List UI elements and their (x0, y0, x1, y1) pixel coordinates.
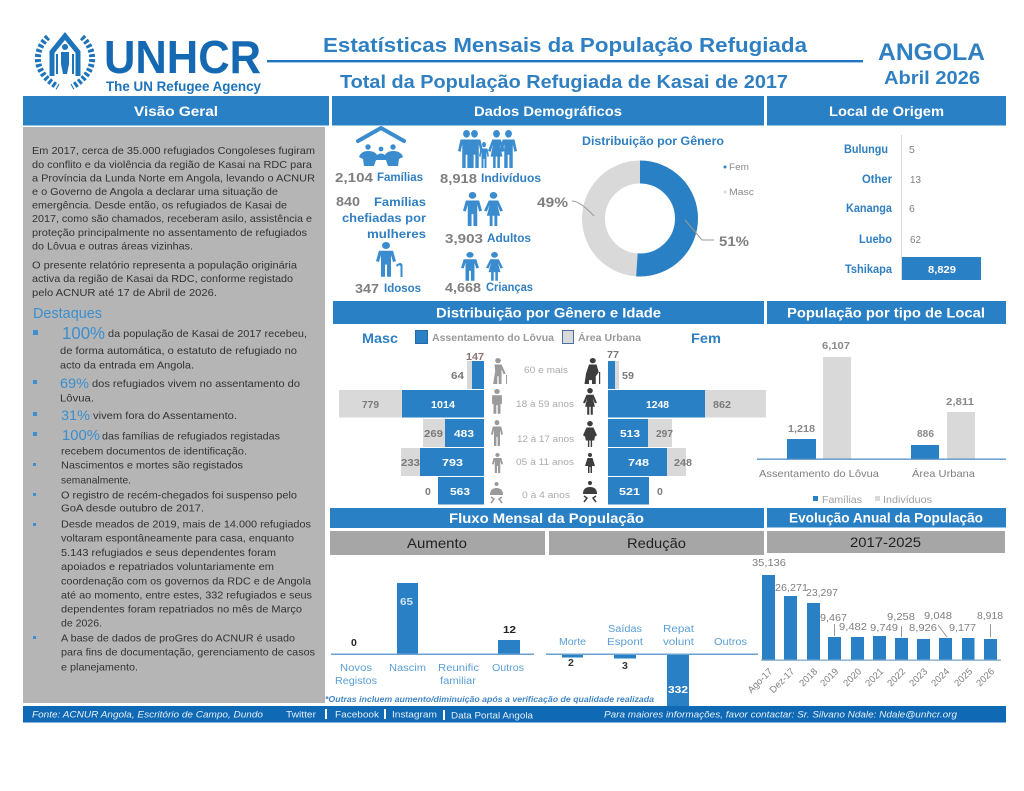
chart: monthly increase: 65 (400, 596, 413, 608)
values: 297 (656, 428, 673, 440)
values: 862 (713, 399, 731, 411)
axis labels: 2020 (841, 666, 864, 689)
header: Distribuição por Gênero e Idade: Distribuição por Gênero e Idade (436, 306, 662, 320)
icon: elderly (376, 242, 402, 277)
bullet list: para fins de documentação, gerenciamento de casos (61, 646, 315, 658)
bullet list: Nascimentos e mortes são registados (61, 460, 243, 472)
bullet list: de 2026. (61, 618, 102, 630)
icon: adults (463, 192, 503, 226)
values: 513 (620, 428, 640, 440)
chart: monthly decrease: Espont (607, 637, 643, 648)
chart: origin: Other (862, 174, 893, 186)
text block: introduction: activa da região de Kasai da RDC, conforme registado (32, 273, 293, 285)
values: 0 (657, 486, 663, 498)
chart: monthly increase: Novos (340, 663, 372, 674)
chart: origin (844, 135, 981, 280)
title: Estatísticas Mensais da População Refugiada (323, 34, 808, 57)
chart: population by location type: 2,811 (946, 396, 974, 408)
text: elderly count: Idosos (384, 283, 421, 295)
header: Visão Geral: Visão Geral (134, 104, 218, 119)
chart: gender donut: 49% (537, 194, 569, 210)
axis labels: 2023 (907, 666, 930, 689)
text block: introduction: O presente relatório representa a população originária (32, 260, 297, 272)
footer: Para maiores informações, favor contactar: Sr. Silvano Ndale: Ndale@unhcr.org (604, 710, 957, 720)
chart: monthly decrease: 2 (568, 657, 574, 669)
header: Fluxo Mensal da População (330, 508, 764, 528)
axis labels: 2026 (974, 666, 997, 689)
legend: Assentamento do Lôvua (432, 332, 554, 344)
header: Local de Origem (767, 96, 1006, 126)
values: 0 (425, 486, 431, 498)
bullet list: O registro de recém-chegados foi suspenso pelo (61, 490, 297, 502)
chart: monthly increase: Outros (492, 663, 524, 674)
text: individuals count: 8,918 (440, 171, 477, 186)
bullet list: da população de Kasai de 2017 recebeu, (108, 328, 307, 340)
text block: introduction: a Província da Lunda Norte em Angola, levando o ACNUR (32, 172, 315, 184)
heading: Destaques: Destaques (33, 306, 102, 322)
chart: origin: Kananga (846, 203, 893, 215)
chart: annual evolution: 9,177 (949, 622, 976, 634)
text: female-headed households: mulheres (367, 229, 426, 241)
text block: introduction: do Lôvua e outras áreas vizinhas. (32, 240, 193, 252)
bullet list: apoiados e repatriados voluntariamente em (61, 561, 274, 573)
header: População por tipo de Local: População por tipo de Local (787, 306, 985, 320)
subheader: Redução: Redução (627, 535, 686, 551)
text: adults count: Adultos (487, 233, 531, 245)
icons: female age groups (583, 358, 600, 502)
values: 1014 (431, 399, 455, 411)
values: 59 (622, 370, 634, 382)
text: adults count: 3,903 (445, 231, 483, 246)
values: 521 (619, 486, 640, 498)
icon: children (461, 252, 503, 281)
chart: annual evolution: 8,926 (909, 622, 937, 634)
values: 248 (674, 457, 692, 469)
header: Distribuição por Gênero e Idade (333, 301, 764, 324)
age labels: 12 à 17 anos (517, 434, 575, 444)
text block: introduction: pelo ACNUR até 17 de Abril de 2026. (32, 287, 217, 299)
country: ANGOLA (878, 39, 985, 66)
chart: monthly decrease: Repat (663, 624, 694, 635)
title rule (267, 60, 863, 62)
chart: monthly increase: familiar (440, 676, 477, 687)
chart: gender donut (537, 136, 755, 265)
values: 77 (607, 349, 619, 361)
chart: monthly increase: Registos (335, 676, 377, 687)
axis labels: Dez-17 (768, 666, 797, 696)
chart: population by location type: 6,107 (822, 340, 850, 352)
chart: population by location type: Assentamento do Lôvua (759, 468, 879, 480)
text block: introduction: e o Governo de Angola a declarar uma situação de (32, 186, 278, 198)
date: Abril 2026 (884, 67, 980, 88)
chart: monthly decrease: Outros (714, 637, 747, 648)
icon: families (358, 128, 404, 166)
panel: overview (23, 127, 325, 703)
axis labels: 2022 (885, 666, 908, 689)
chart: monthly decrease: Saídas (608, 624, 642, 635)
header: Evolução Anual da População: Evolução Anual da População (789, 510, 983, 526)
chart: annual evolution: 9,048 (924, 610, 952, 622)
text: female-headed households (336, 194, 427, 241)
header: Visão Geral (23, 96, 329, 126)
chart: origin: Luebo (859, 234, 892, 246)
legend: Masc (362, 330, 398, 346)
legend (813, 494, 932, 506)
bullet list: das famílias de refugiados registadas (102, 430, 280, 442)
text: children count: 4,668 (445, 280, 481, 295)
bullet list: GoA desde outubro de 2017. (61, 502, 204, 514)
bullet list: coordenação com os governos da RDC e de Angola (61, 576, 311, 588)
bullet list: e planejamento. (61, 662, 138, 674)
chart: monthly increase: 12 (503, 624, 516, 636)
values (362, 349, 731, 498)
logo: UNHCR: UNHCR (104, 31, 261, 83)
text: individuals count (440, 171, 541, 186)
chart: gender donut: Fem (729, 162, 749, 172)
bullet list: de forma automática, o estatuto de refugiado no (60, 345, 297, 357)
icons: male age groups (490, 358, 507, 503)
text: adults count (445, 231, 531, 246)
footer (23, 706, 1006, 722)
text block: introduction: 2017, como são chamados, receberam asilo, assistência e (32, 213, 312, 225)
age labels: 60 e mais (524, 365, 569, 375)
legend: Famílias (822, 494, 862, 506)
bullet list: dos refugiados vivem no assentamento do (92, 378, 300, 390)
chart: annual evolution: 8,918 (977, 610, 1003, 622)
chart: monthly decrease: volunt (663, 637, 694, 648)
chart: monthly decrease: 3 (622, 660, 628, 672)
age labels: 18 à 59 anos (516, 399, 575, 409)
text: children count (445, 280, 533, 295)
footer: Twitter (286, 710, 316, 720)
text: female-headed households: Famílias (374, 197, 426, 209)
icon: individuals (458, 130, 517, 168)
values: 748 (628, 457, 649, 469)
chart: annual evolution: 9,749 (870, 622, 898, 634)
age labels: 05 à 11 anos (516, 457, 575, 467)
bullet list: 69% (60, 375, 89, 391)
bars (339, 361, 766, 504)
axis labels: 2024 (929, 666, 952, 689)
footnote: *Outras incluem aumento/diminuição após a verificação de qualidade realizada (325, 695, 655, 704)
chart: origin: 8,829 (928, 264, 956, 276)
bullet list: voltaram espontâneamente para casa, enquanto (61, 532, 294, 544)
values: 64 (451, 370, 464, 382)
heading: gender distribution: Distribuição por Gênero (582, 136, 724, 148)
text: elderly count: 347 (355, 281, 379, 296)
bullet list: acto da entrada em Angola. (60, 360, 194, 372)
chart: origin: 13 (910, 174, 921, 186)
footer: Instagram (392, 710, 437, 720)
axis labels: 2019 (818, 666, 841, 689)
bullet list: 5.143 refugiados e seus dependentes foram (61, 547, 276, 559)
chart: annual evolution: 9,467 (820, 612, 847, 624)
text block: introduction: Em 2017, cerca de 35.000 refugiados Congoleses fugiram (32, 145, 315, 157)
chart: annual evolution: 35,136 (752, 557, 786, 569)
values: 1248 (646, 399, 669, 411)
text: elderly count (355, 281, 421, 296)
header: Local de Origem: Local de Origem (829, 104, 944, 119)
values: 269 (424, 428, 443, 440)
text: female-headed households: 840 (336, 194, 360, 209)
subtitle: Total da População Refugiada de Kasai de 2017 (340, 71, 788, 92)
values: 563 (450, 486, 470, 498)
chart: monthly decrease (546, 624, 758, 706)
text: families count: Famílias (377, 172, 423, 184)
text: individuals count: Indivíduos (481, 173, 541, 185)
footer: Fonte: ACNUR Angola, Escritório de Campo, Dundo (32, 710, 263, 720)
text block: introduction: proteção principalmente no assentamento de refugiados (32, 227, 307, 239)
chart: population by location type: Área Urbana (912, 467, 975, 480)
panel: demographics (335, 128, 755, 296)
chart: monthly increase (331, 583, 534, 687)
age labels: 0 à 4 anos (522, 490, 571, 500)
values: 779 (362, 399, 379, 411)
bullet list: até ao momento, entre estes, 332 refugiados e seus (61, 590, 312, 602)
values: 147 (466, 351, 484, 363)
chart: monthly increase: Nascim (389, 663, 426, 674)
header: Dados Demográficos: Dados Demográficos (474, 104, 622, 119)
bullet list: Desde meados de 2019, mais de 14.000 refugiados (61, 518, 311, 530)
bullet list: dependentes foram repatriados no mês de Março (61, 604, 302, 616)
values: 483 (454, 428, 474, 440)
header: Fluxo Mensal da População: Fluxo Mensal da População (449, 511, 644, 526)
axis labels: 2025 (952, 666, 975, 689)
footer: Data Portal Angola (451, 710, 533, 720)
text: children count: Crianças (486, 282, 533, 294)
header: Dados Demográficos (332, 96, 764, 126)
chart: monthly decrease: 332 (668, 684, 688, 696)
bullet list: Lôvua. (60, 392, 94, 404)
chart: population pyramid (339, 330, 766, 504)
subheader: Aumento: Aumento (407, 535, 467, 551)
age labels (516, 365, 575, 500)
chart: population by location type: 1,218 (788, 423, 815, 435)
chart: monthly increase: 0 (351, 637, 357, 649)
header: Evolução Anual da População (767, 508, 1006, 528)
logo: UNHCR (38, 31, 261, 94)
chart: origin: 5 (909, 144, 915, 156)
bullet list: 100% (62, 428, 100, 444)
axis labels: 2018 (797, 666, 820, 689)
text: families count: 2,104 (335, 170, 374, 185)
subheader: 2017-2025 (767, 531, 1005, 553)
axis labels: Ago-17 (746, 666, 775, 696)
text block: introduction: emergência. Desde então, os refugiados de Kasai de (32, 200, 287, 212)
chart: monthly increase: Reunific (438, 663, 479, 674)
text block: introduction: do conflito e da violência da região de Kasai na RDC para (32, 159, 312, 171)
bullet list: vivem fora do Assentamento. (93, 410, 237, 422)
chart: annual evolution (746, 557, 1003, 696)
chart: annual evolution: 9,482 (839, 621, 867, 633)
bullet list: recebem documentos de identificação. (61, 446, 247, 458)
chart: annual evolution: 23,297 (806, 587, 838, 599)
bullet list: 31% (61, 407, 90, 423)
values: 793 (442, 457, 463, 469)
chart: origin: 62 (910, 234, 921, 246)
logo: UNHCR: The UN Refugee Agency (106, 78, 261, 94)
axis labels: 2021 (863, 666, 886, 689)
chart: annual evolution: 26,271 (775, 582, 808, 594)
subheader: Aumento (330, 531, 545, 555)
bullet list: A base de dados de proGres do ACNUR é usado (61, 632, 295, 644)
chart: monthly decrease: Morte (559, 637, 586, 648)
legend: Área Urbana (578, 331, 641, 344)
header: População por tipo de Local (767, 301, 1006, 324)
chart: origin: Tshikapa (845, 264, 893, 276)
legend (362, 330, 721, 346)
text: female-headed households: chefiadas por (342, 213, 427, 225)
footer: Facebook (335, 710, 380, 720)
axis labels (746, 666, 997, 696)
text block: introduction (32, 145, 315, 299)
subheader: 2017-2025: 2017-2025 (850, 534, 921, 550)
values: 233 (401, 457, 420, 469)
chart: gender donut: Masc (729, 187, 755, 197)
chart: annual evolution: 9,258 (887, 611, 915, 623)
text: families count (335, 170, 423, 185)
bullet list (33, 323, 315, 674)
legend: Indivíduos (883, 494, 932, 506)
bullet list: semanalmente. (61, 474, 131, 486)
chart: origin: Bulungu (844, 144, 888, 156)
bullet list: 100% (62, 323, 105, 343)
chart: population by location type (757, 340, 1006, 506)
chart: origin: 6 (909, 203, 915, 215)
chart: gender donut: 51% (719, 233, 750, 249)
subheader: Redução (549, 531, 764, 555)
icon: laurel wreath and sheltering hands (38, 36, 92, 87)
legend: Fem (691, 330, 721, 346)
chart: population by location type: 886 (917, 428, 934, 440)
